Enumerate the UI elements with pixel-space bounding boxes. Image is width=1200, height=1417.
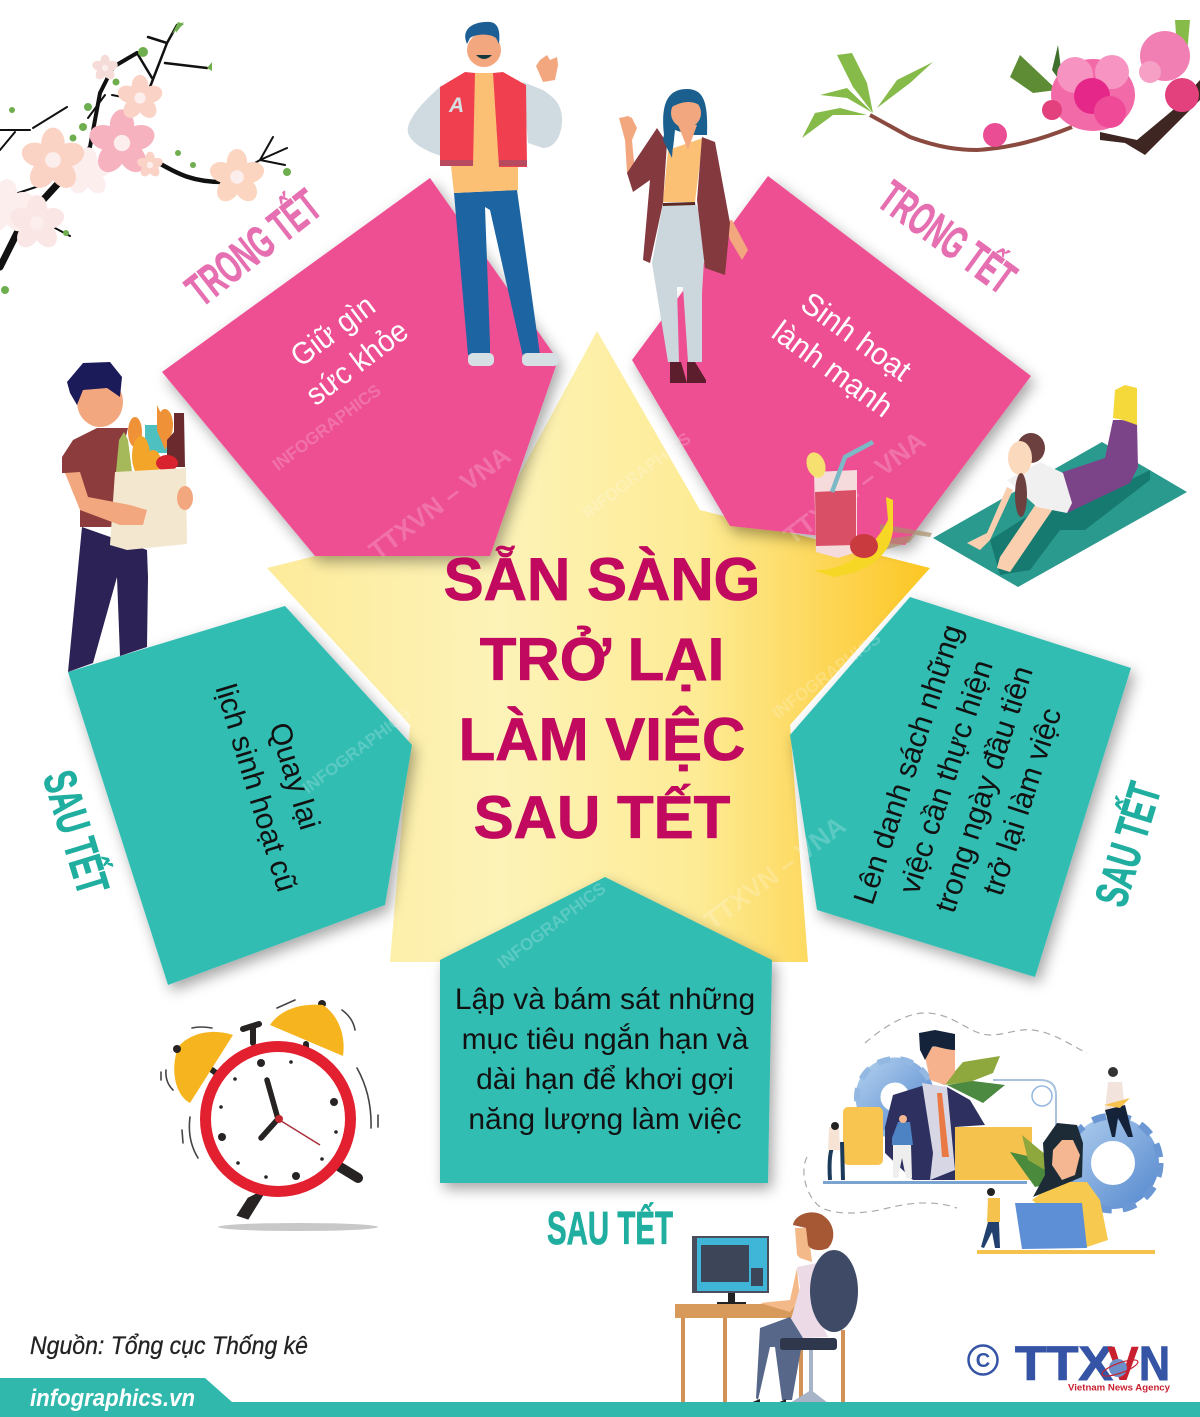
title: TRỞ LẠI: [480, 626, 724, 693]
logo: TTXVN: N: [1139, 1338, 1170, 1391]
icon: alarm clock: [161, 1000, 378, 1231]
text: lên danh sách: việc cần thực hiện: [893, 656, 1000, 898]
logo: TTXVN: C: [976, 1350, 990, 1372]
logo: TTXVN: Vietnam News Agency: [1068, 1382, 1171, 1394]
text: INFOGRAPHICS: [269, 381, 384, 474]
text: lập và bám sát: năng lượng làm việc: [468, 1103, 742, 1136]
text: INFOGRAPHICS: [494, 879, 609, 972]
text: lập và bám sát: dài hạn để khơi gợi: [476, 1063, 734, 1096]
panel: pink pentagon right: [632, 176, 1031, 545]
icon: woman at computer: [675, 1212, 858, 1405]
text: quay lại: lịch sinh hoạt cũ: [209, 680, 303, 896]
icon: man in red jacket: A: [448, 94, 464, 117]
title: LÀM VIỆC: [459, 706, 745, 773]
text: lập và bám sát: mục tiêu ngắn hạn và: [462, 1023, 749, 1056]
icon: yoga woman on mat: [933, 385, 1187, 587]
text: giữ gìn sức khỏe: sức khỏe: [300, 314, 415, 412]
panel: pink pentagon left: [162, 178, 558, 556]
text: sinh hoạt lành mạnh: Sinh hoạt: [794, 286, 918, 388]
text: sinh hoạt lành mạnh: lành mạnh: [766, 314, 899, 424]
panel: gold star: [267, 331, 930, 962]
text: lên danh sách: Lên danh sách những: [848, 621, 969, 909]
icon: smoothie and banana: [803, 442, 932, 577]
icon: peach blossom branch right: [802, 20, 1200, 155]
icon: man in red jacket: [408, 22, 562, 366]
title: SẴN SÀNG: [444, 546, 760, 613]
heading: sau tết right: SAU TẾT: [1085, 776, 1172, 912]
text: INFOGRAPHICS: [579, 429, 694, 522]
panel: teal pentagon right: [790, 597, 1131, 977]
logo: TTXVN: V: [1107, 1338, 1139, 1391]
icon: business team with gears: [804, 1013, 1160, 1254]
footer url: infographics.vn: [30, 1385, 195, 1412]
text: INFOGRAPHICS: [299, 704, 414, 797]
text: lên danh sách: trở lại làm việc: [977, 704, 1068, 899]
text: lập và bám sát: Lập và bám sát những: [455, 983, 755, 1016]
text: TTXVN – VNA: [363, 440, 516, 566]
icon: man with grocery bag: [62, 362, 193, 672]
panel: teal pentagon left: [68, 606, 412, 985]
text: giữ gìn sức khỏe: Giữ gìn: [284, 289, 382, 374]
icon: cherry blossom branch left: [0, 22, 291, 294]
text: INFOGRAPHICS: [769, 629, 884, 722]
text: lên danh sách: trong ngày đầu tiên: [929, 662, 1040, 917]
source text: Nguồn: Tổng cục Thống kê: [30, 1332, 308, 1360]
heading: sau tết left: SAU TẾT: [32, 765, 119, 901]
heading: trong tết left: TRONG TẾT: [176, 179, 330, 316]
icon: woman in brown cardigan: [619, 89, 748, 383]
title: SAU TẾT: [474, 784, 730, 851]
panel: teal pentagon bottom: [440, 877, 772, 1183]
text: TTXVN – VNA: [698, 810, 851, 936]
text: quay lại: Quay lại: [262, 719, 326, 834]
footer bar: [0, 1378, 1200, 1417]
heading: trong tết right: TRONG TẾT: [869, 171, 1025, 304]
heading: sau tết bottom: SAU TẾT: [547, 1202, 673, 1255]
text: TTXVN – VNA: [778, 425, 931, 551]
logo: TTXVN: TTX: [1015, 1338, 1113, 1391]
logo: TTXVN: [968, 1338, 1171, 1394]
